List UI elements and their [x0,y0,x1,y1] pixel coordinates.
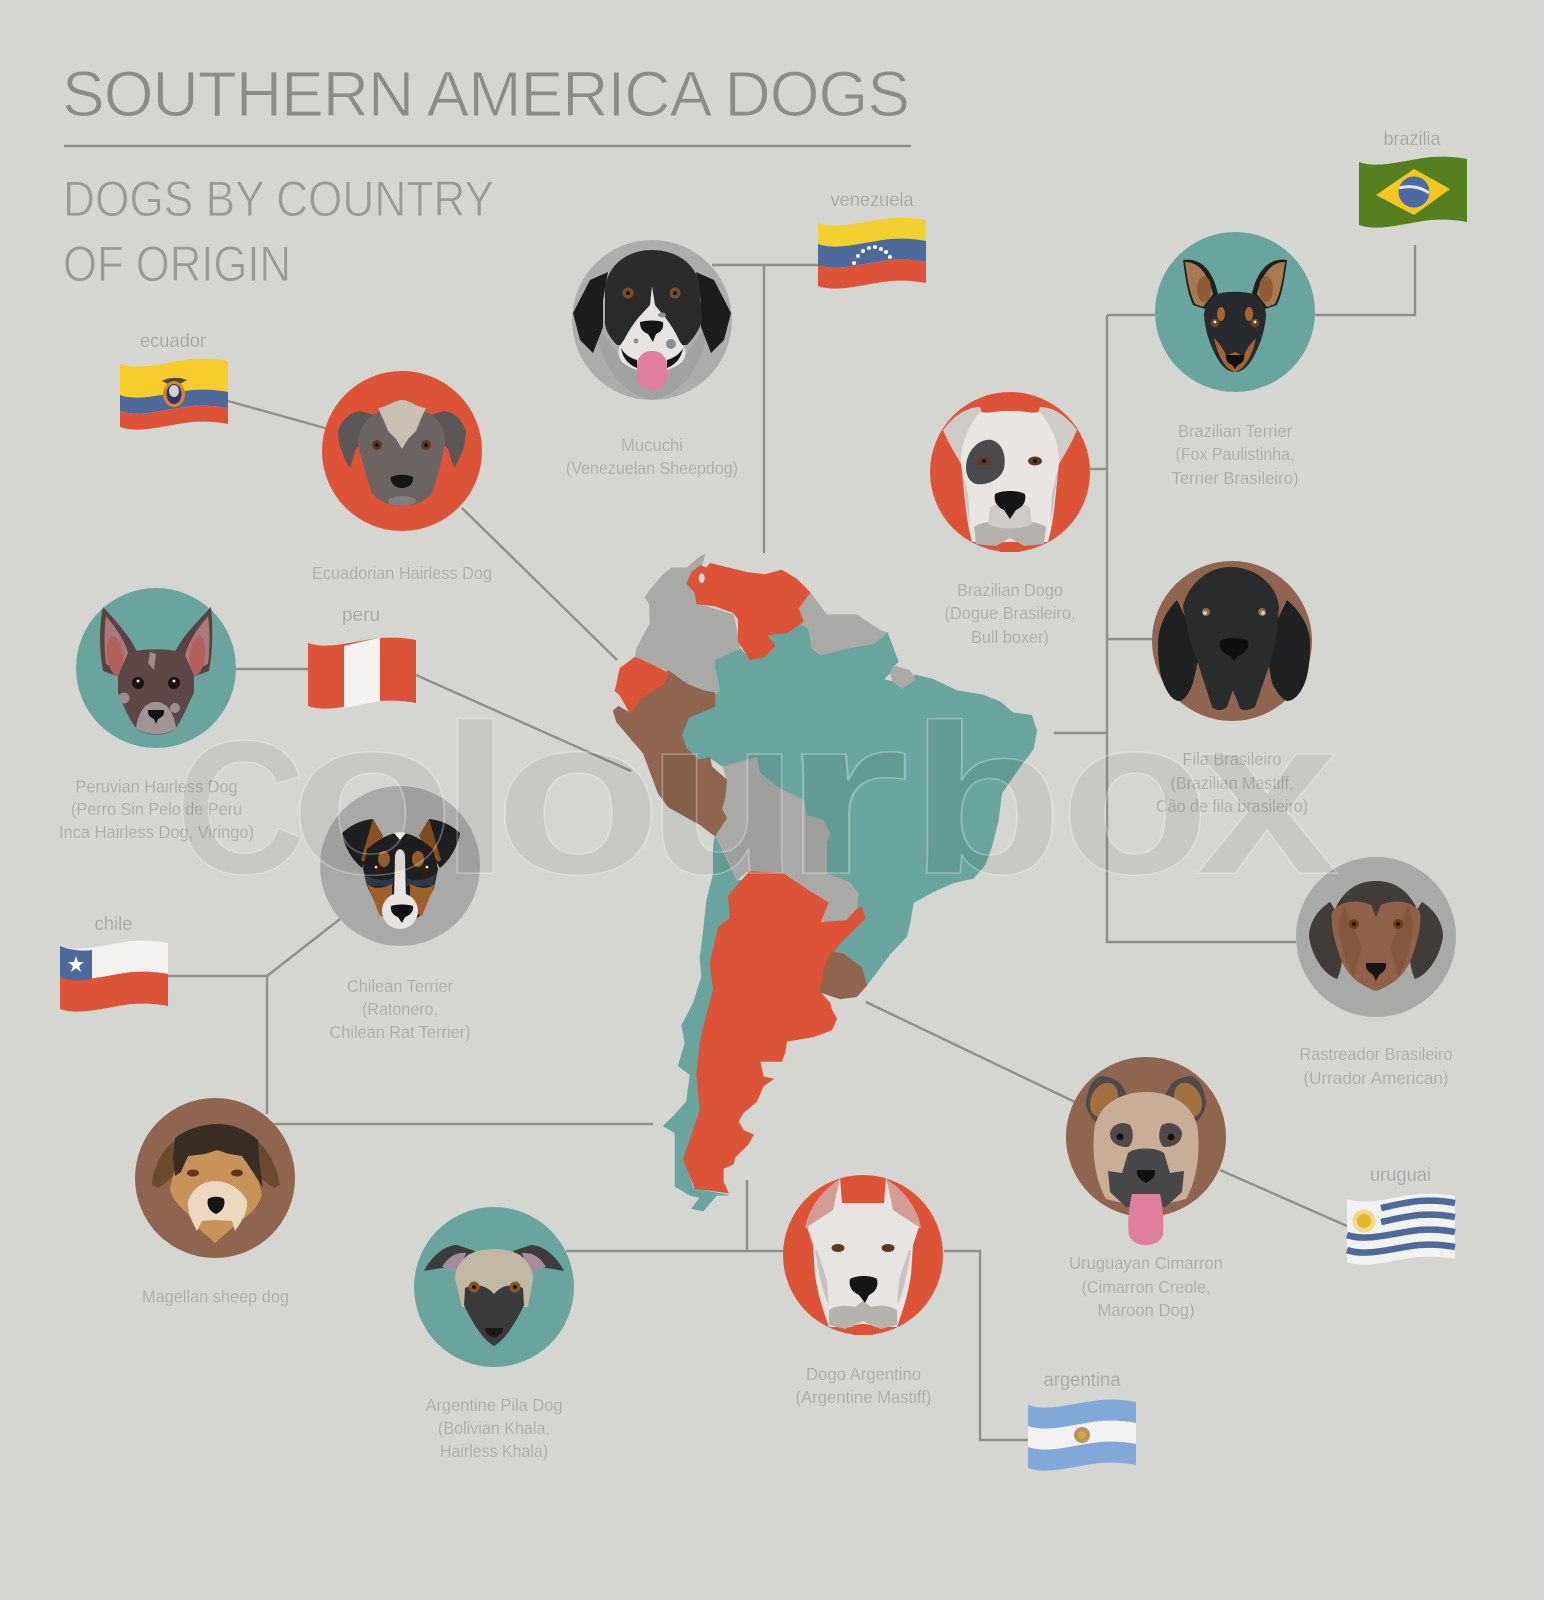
icon: Fila dog [1152,561,1312,721]
label: Uruguayan Cimarron [1069,1253,1223,1273]
label [59,776,254,842]
subtitle [63,171,494,292]
label [944,580,1076,647]
label [426,1395,562,1461]
flag: Chile [60,913,168,1012]
panel: Peruvian Hairless Dog [59,588,254,842]
icon: Cimarron dog [1066,1057,1226,1245]
flag: Brazil: brazilia [1384,128,1441,150]
country: Colombia [635,555,740,693]
label: Brazilian Terrier [1178,421,1292,441]
flag: Chile: chile [94,913,132,935]
label [566,435,738,478]
country: Venezuela [687,563,810,659]
watermark: C [175,702,306,914]
flag: Uruguay [1347,1164,1455,1265]
icon: Pila dog [414,1207,574,1367]
icon: Ecuadorian dog [322,371,482,531]
country: Argentina [683,872,865,1193]
country: Bolivia and Paraguay [715,758,858,923]
map of South America [613,555,1037,1211]
label: Ecuadorian Hairless Dog [312,563,492,583]
country: Ecuador [615,657,668,713]
flag: Venezuela: venezuela [830,189,914,211]
country: Guyanas [798,593,887,655]
watermark: b [910,681,1063,919]
label [796,1364,932,1407]
label: (Perro Sin Pelo de Perú [71,799,242,819]
label: (Venezuelan Sheepdog) [566,458,738,478]
country: Chile [663,836,742,1211]
icon: Chilean terrier dog [320,786,480,946]
connector lines [168,245,1415,1440]
panel: Ecuadorian Hairless Dog [312,371,492,583]
label: (Urrador American) [1304,1068,1448,1088]
panel: Argentine Pila Dog [414,1207,574,1461]
label: Chilean Rat Terrier) [330,1022,470,1042]
label [1069,1253,1223,1320]
flag: Peru: peru [342,604,380,626]
label: Peruvian Hairless Dog [76,776,238,796]
panel: Chilean Terrier [320,786,480,1042]
country: Uruguay [820,952,867,999]
watermark: r [780,669,910,921]
flag: Ecuador [120,330,228,430]
flag: Peru [308,604,416,709]
label: (Argentine Mastiff) [796,1387,932,1407]
icon: Mucuchi dog [572,240,732,400]
icon: Magellan dog [135,1098,295,1258]
label: (Cimarron Creole, [1082,1277,1210,1297]
label [1156,749,1308,816]
label: (Bolivian Khala, [438,1418,550,1438]
icon: Brazilian Terrier dog [1155,232,1315,392]
label: Terrier Brasileiro) [1172,468,1298,488]
flag: Ecuador: ecuador [140,330,206,352]
label: Cão de fila brasileiro) [1156,796,1308,816]
label: Brazilian Dogo [957,580,1063,600]
country: Brazil [682,624,1037,985]
label: Bull boxer) [971,627,1049,647]
label: (Ratonero, [362,999,438,1019]
watermark: o [1060,669,1210,921]
flag: Uruguay: uruguai [1370,1164,1431,1186]
country: Peru [613,671,727,836]
panel: Brazilian Terrier [1155,232,1315,488]
watermark: o [494,669,662,921]
panel: Brazilian Dogo [930,392,1090,647]
label: Chilean Terrier [347,976,453,996]
flag: Argentina [1028,1369,1136,1471]
subtitle: OF ORIGIN [63,236,291,292]
flag: Venezuela [818,189,926,289]
panel: Uruguayan Cimarron [1066,1057,1226,1320]
label: Fila Brasileiro [1182,749,1282,769]
label [330,976,470,1042]
panel: Magellan sheep dog [135,1098,295,1306]
panel: Mucuchi [566,240,738,478]
label: (Brazilian Mastiff, [1170,773,1294,793]
label: Maroon Dog) [1098,1300,1194,1320]
label: Hairless Khala) [440,1441,548,1461]
icon: Rastreador dog [1296,857,1456,1017]
panel: Dogo Argentino [783,1175,943,1407]
country: French Guiana [890,666,915,688]
label [1300,1044,1452,1088]
panel: Fila Brasileiro [1152,561,1312,816]
icon: Brazilian Dogo dog [930,392,1090,552]
watermark [175,669,1339,921]
label: Argentine Pila Dog [426,1395,562,1415]
watermark: x [1196,669,1339,921]
flag: Argentina: argentina [1044,1369,1121,1391]
label: Dogo Argentino [806,1364,921,1384]
watermark: o [289,669,455,921]
icon: Peruvian dog [76,588,236,748]
label: Magellan sheep dog [142,1286,289,1306]
flag: Brazil [1359,128,1467,228]
label: (Fox Paulistinha, [1176,444,1294,464]
title: SOUTHERN AMERICA DOGS [62,58,910,130]
label: Inca Hairless Dog, Viringo) [59,822,254,842]
watermark: u [647,669,799,921]
panel: Rastreador Brasileiro [1296,857,1456,1088]
watermark: l [439,681,512,919]
label: Rastreador Brasileiro [1300,1044,1452,1064]
label: (Dogue Brasileiro, [944,603,1076,623]
label [1172,421,1298,488]
label: Mucuchi [621,435,683,455]
icon: Dogo Argentino dog [783,1175,943,1335]
subtitle: DOGS BY COUNTRY [63,171,494,227]
